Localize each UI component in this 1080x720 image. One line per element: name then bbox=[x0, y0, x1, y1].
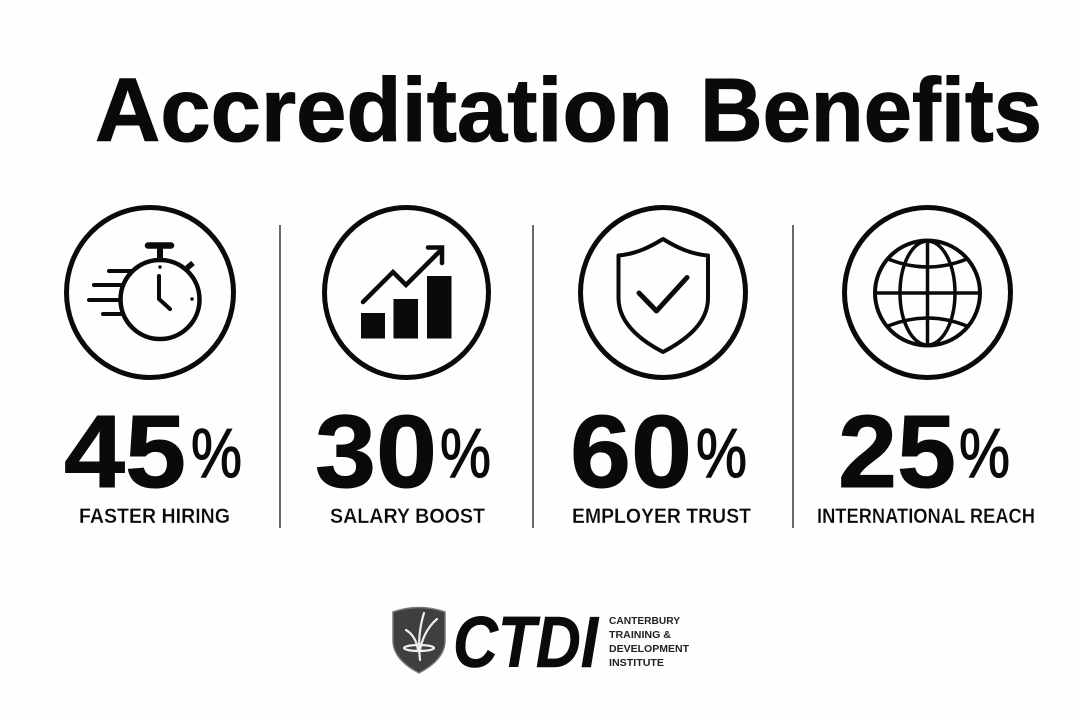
icon: crest shield bbox=[393, 608, 445, 673]
institute name: TRAINING & bbox=[609, 630, 671, 641]
institute name: INSTITUTE bbox=[609, 658, 664, 669]
wordmark: CTDI bbox=[453, 603, 600, 683]
stat: 25%: 25 bbox=[838, 394, 956, 509]
stat: 45%: % bbox=[191, 414, 242, 492]
institute name: CANTERBURY bbox=[609, 616, 680, 627]
icon: shield with check bbox=[580, 208, 746, 378]
panel: salary boost bbox=[315, 208, 491, 528]
label: international reach: INTERNATIONAL REACH bbox=[817, 505, 1035, 528]
stat: 25% bbox=[838, 394, 1010, 509]
stat: 45% bbox=[64, 394, 242, 509]
stat: 60%: % bbox=[696, 414, 747, 492]
stat: 30%: % bbox=[440, 414, 491, 492]
stat: 30%: 30 bbox=[315, 394, 437, 509]
panel: employer trust bbox=[570, 208, 751, 528]
title: Accreditation bbox=[95, 61, 673, 161]
stat: 60% bbox=[570, 394, 747, 509]
logo: CTDI bbox=[393, 603, 689, 683]
panel: faster hiring bbox=[64, 208, 242, 528]
title bbox=[95, 61, 1042, 161]
institute name bbox=[609, 616, 689, 669]
institute name: DEVELOPMENT bbox=[609, 644, 689, 655]
label: employer trust: EMPLOYER TRUST bbox=[572, 505, 751, 528]
stat: 25%: % bbox=[959, 414, 1010, 492]
icon: rising bar chart bbox=[324, 208, 488, 378]
stat: 60%: 60 bbox=[570, 394, 692, 509]
icon: globe bbox=[844, 208, 1010, 378]
label: salary boost: SALARY BOOST bbox=[330, 505, 485, 528]
stat: 45%: 45 bbox=[64, 394, 186, 509]
label: faster hiring: FASTER HIRING bbox=[79, 505, 230, 528]
title: Benefits bbox=[700, 61, 1042, 161]
stat: 30% bbox=[315, 394, 491, 509]
panel: international reach bbox=[817, 208, 1035, 528]
icon: stopwatch bbox=[66, 208, 234, 378]
